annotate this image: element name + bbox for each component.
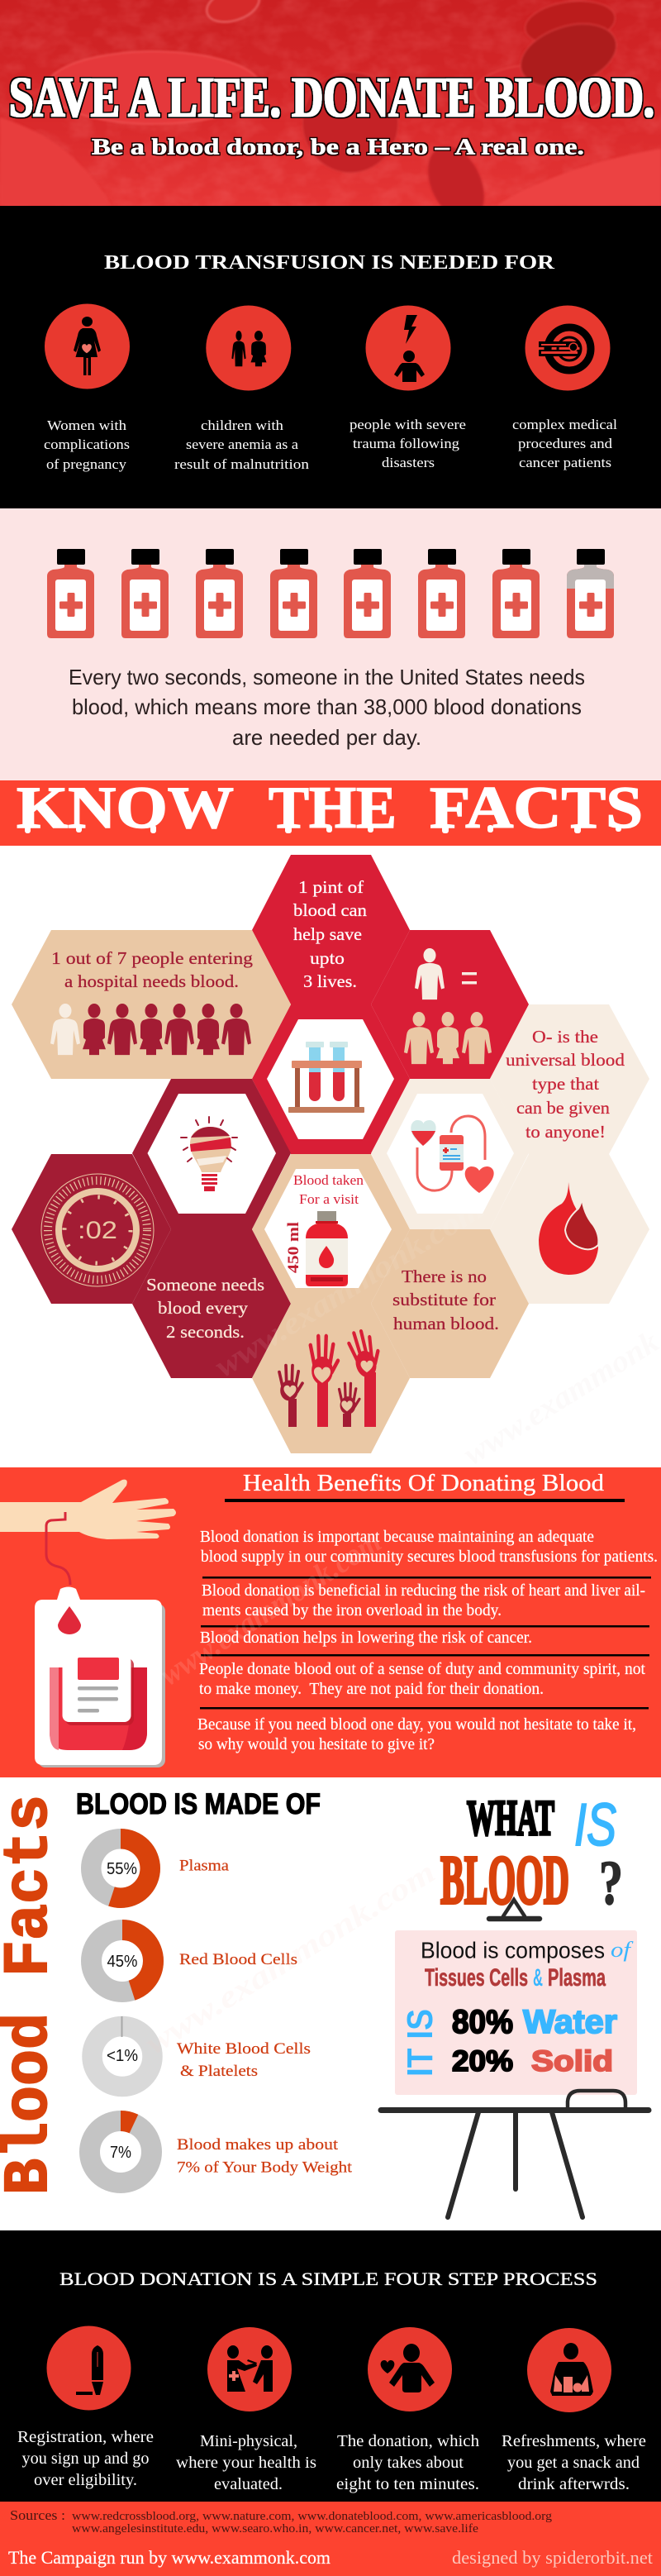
text: tissues cells plasma: Tissues Cells <box>425 1964 528 1992</box>
text: pint: help save <box>293 924 362 944</box>
text: complex <box>512 417 617 470</box>
band: know the facts: KNOW <box>17 775 234 841</box>
text: registration <box>17 2428 154 2489</box>
donut: white cells: <1% <box>107 2047 138 2065</box>
benefits text: so why would you hesitate to give it? <box>198 1735 435 1753</box>
text: blood taken <box>293 1172 364 1207</box>
text: refreshments <box>502 2432 646 2493</box>
icon: refreshments <box>527 2328 611 2412</box>
text: donation: eight to ten minutes. <box>336 2475 479 2493</box>
icon: trauma <box>365 306 451 390</box>
hex: pale IV <box>371 1079 529 1229</box>
text: complex: complex medical <box>512 417 617 432</box>
sources: www.redcrossblood.org, www.nature.com, www.donateblood.com, www.americasblood.org <box>72 2510 553 2523</box>
panel: blood facts <box>0 1777 661 2230</box>
text: donation: only takes about <box>353 2454 464 2472</box>
hex: one equals three <box>371 930 529 1079</box>
donut: plasma <box>91 1839 150 1898</box>
icon: test tubes <box>288 1042 364 1113</box>
campaign credit: The Campaign run by www.exammonk.com <box>8 2547 330 2568</box>
icon: registration pen <box>46 2326 131 2411</box>
icon: seven people <box>50 1004 251 1055</box>
text: tissues cells plasma: Plasma <box>548 1964 606 1992</box>
icon: tube <box>46 1512 70 1585</box>
panel: hexagon facts <box>0 846 661 1467</box>
text: children: severe anemia as a <box>186 436 299 452</box>
watermarks: www.exammonk.com <box>140 1854 441 2062</box>
icon: arm <box>0 1480 176 1539</box>
text: children <box>174 417 309 472</box>
text: refreshments: Refreshments, where <box>502 2432 646 2450</box>
icon: person equals three <box>404 948 492 1064</box>
stat: 80% water: Water <box>523 2004 617 2040</box>
easel top <box>489 1900 540 1919</box>
stat: 20% solid <box>452 2045 613 2077</box>
hex: blood volume <box>252 1154 410 1304</box>
text: one in seven: 1 out of 7 people entering <box>51 948 254 968</box>
text: someone needs <box>146 1275 264 1342</box>
benefits text: Blood donation is beneficial in reducing the risk of heart and liver ail- <box>202 1581 645 1600</box>
label: body weight: Blood makes up about <box>177 2136 339 2154</box>
heading: what is blood: IS <box>574 1792 616 1858</box>
label: body weight: 7% of Your Body Weight <box>177 2159 353 2176</box>
text: refreshments: drink afterwrds. <box>518 2475 630 2493</box>
benefits text <box>197 1528 658 1753</box>
text: O negative: can be given <box>516 1098 611 1118</box>
label: white cells: & Platelets <box>180 2063 258 2080</box>
band: know the facts: THE <box>269 775 397 841</box>
watermarks <box>140 1190 661 2062</box>
subtitle: Be a blood donor, be a Hero – A real one. <box>92 134 584 159</box>
watermarks: www.exammonk.com <box>154 1524 388 1693</box>
donut: red cells <box>91 1930 154 1992</box>
statistic text: Every two seconds, someone in the United States needs <box>69 665 585 689</box>
header banner <box>0 0 661 230</box>
icon: blood bag <box>35 1587 165 1767</box>
hex inner: white test tubes <box>267 1019 394 1139</box>
benefits text: Because if you need blood one day, you would not hesitate to take it, <box>197 1715 636 1734</box>
text: refreshments: you get a snack and <box>507 2454 640 2472</box>
statistic text: are needed per day. <box>232 725 421 750</box>
icon: bandaged bulb <box>181 1117 237 1191</box>
text: complex: cancer patients <box>519 455 611 470</box>
designer credit: designed by spiderorbit.net <box>452 2547 653 2568</box>
icon: clock: :02 <box>78 1217 117 1244</box>
text: pregnancy: of pregnancy <box>46 456 127 472</box>
text: children: children with <box>201 417 284 433</box>
text: no substitute: There is no <box>402 1267 487 1286</box>
text: trauma: disasters <box>382 455 435 470</box>
hex: someone needs <box>132 1229 291 1378</box>
panel: health benefits <box>0 1467 661 1777</box>
hex inner: white bulb <box>147 1094 276 1214</box>
donut: plasma: 55% <box>107 1860 137 1878</box>
text: O negative <box>506 1027 625 1142</box>
icon: pregnant woman <box>45 304 130 389</box>
sources <box>10 2507 553 2535</box>
text: donation: The donation, which <box>337 2432 479 2450</box>
heading: blood is made of: BLOOD IS MADE OF <box>76 1788 321 1820</box>
stat: 20% solid: 20% <box>452 2045 513 2077</box>
statistic text: blood, which means more than 38,000 blood donations <box>72 694 582 719</box>
panel: transfusion needs <box>0 206 661 508</box>
heading: what is blood: WHAT <box>467 1791 554 1845</box>
band: know the facts: FACTS <box>430 775 643 841</box>
stat: 20% solid: Solid <box>531 2045 613 2077</box>
text: blood taken: For a visit <box>299 1191 359 1207</box>
text: one in seven: a hospital needs blood. <box>64 971 239 991</box>
text: pint: upto <box>310 948 345 968</box>
icon: raised hands <box>279 1329 383 1427</box>
icon: IV blood bag <box>411 1116 494 1193</box>
icon: mini physical <box>207 2327 292 2411</box>
text: trauma: trauma following <box>353 436 459 451</box>
icon: clock <box>41 1174 154 1286</box>
text: it is: IT IS <box>400 2009 440 2077</box>
text: pregnancy: complications <box>44 436 130 452</box>
hex inner: white IV <box>387 1094 514 1214</box>
text: pint: blood can <box>293 900 367 920</box>
text: mini physical <box>176 2432 316 2493</box>
donut: white cells <box>93 2016 152 2087</box>
hex: no substitute <box>371 1229 529 1378</box>
text: trauma: people with severe <box>350 417 466 432</box>
heading: what is blood <box>440 1791 623 1919</box>
text: O negative: type that <box>532 1074 599 1094</box>
watermarks: www.exammonk <box>458 1324 661 1472</box>
hex: dark bulb <box>132 1079 291 1229</box>
text: blood is composes of: Blood is composes <box>421 1938 605 1963</box>
text: trauma <box>350 417 466 470</box>
text: someone needs: 2 seconds. <box>166 1322 245 1342</box>
stat: 80% water: 80% <box>452 2004 513 2040</box>
hex: hands <box>252 1304 410 1453</box>
text: complex: procedures and <box>518 436 613 451</box>
text: someone needs: Someone needs <box>146 1275 264 1295</box>
donut: body weight <box>89 2121 152 2182</box>
text: no substitute <box>392 1267 499 1333</box>
text: pregnancy <box>44 417 130 472</box>
benefits text: Blood donation helps in lowering the risk of cancer. <box>200 1629 532 1647</box>
icon: blood bottle <box>306 1211 348 1286</box>
text: someone needs: blood every <box>158 1298 248 1318</box>
heading: health benefits: Health Benefits Of Donating Blood <box>243 1470 605 1496</box>
hex: clock <box>12 1154 171 1304</box>
hex: top pint <box>252 855 410 1004</box>
text: pint <box>293 877 367 991</box>
donut: red cells: 45% <box>107 1953 138 1971</box>
text: mini physical: evaluated. <box>214 2475 283 2493</box>
benefits text: ments caused by the iron overload in the body. <box>202 1601 502 1620</box>
text: blood taken: Blood taken <box>293 1172 364 1188</box>
panel: donations per day <box>0 508 661 780</box>
hex: one in seven <box>12 930 291 1079</box>
benefits text: blood supply in our community secures blood transfusions for patients. <box>201 1548 658 1566</box>
text: pregnancy: Women with <box>47 417 127 433</box>
benefits text: Blood donation is important because maintaining an adequate <box>200 1528 594 1546</box>
easel board: of <box>611 1938 634 1962</box>
hex: O negative lower <box>490 1154 649 1304</box>
stat: 80% water <box>452 2004 617 2040</box>
easel stand <box>381 2091 649 2217</box>
icon: donation <box>368 2327 452 2411</box>
label: red cells: Red Blood Cells <box>179 1951 297 1968</box>
text: registration: Registration, where <box>17 2428 154 2446</box>
panel: four step process <box>0 2230 661 2502</box>
hex: O negative upper <box>490 1004 649 1154</box>
benefits text: to make money. They are not paid for their donation. <box>199 1680 544 1698</box>
easel board <box>395 1930 637 2095</box>
sources: Sources : <box>10 2507 65 2523</box>
heading: what is blood: ? <box>599 1849 623 1918</box>
watermarks: www.exammonk.com <box>209 1190 490 1385</box>
text: no substitute: human blood. <box>393 1314 499 1333</box>
bottles row <box>47 549 614 638</box>
text: donation <box>336 2432 479 2493</box>
band: know the facts <box>0 775 661 846</box>
text: O negative: universal blood <box>506 1050 625 1070</box>
text: registration: over eligibility. <box>34 2471 137 2489</box>
label: body weight <box>177 2136 353 2176</box>
text: children: result of malnutrition <box>174 456 309 472</box>
benefits text: People donate blood out of a sense of duty and community spirit, not <box>199 1660 645 1678</box>
text: pint: 3 lives. <box>303 971 357 991</box>
label: plasma: Plasma <box>179 1857 230 1875</box>
label: white cells <box>177 2040 311 2080</box>
sources: www.angelesinstitute.edu, www.searo.who.in, www.cancer.net, www.save.life <box>72 2522 478 2535</box>
text: mini physical: where your health is <box>176 2454 316 2472</box>
heading: four steps: BLOOD DONATION IS A SIMPLE FOUR STEP PROCESS <box>59 2268 597 2289</box>
text: one in seven <box>51 948 254 991</box>
text: O negative: O- is the <box>532 1027 598 1047</box>
text: 450 ml: 450 ml <box>285 1222 302 1273</box>
hex: centre test tubes <box>252 1004 410 1154</box>
icon: children <box>206 306 291 390</box>
text: tissues cells plasma: & <box>533 1964 543 1992</box>
icon: blood drops <box>539 1182 598 1275</box>
text: mini physical: Mini-physical, <box>200 2432 297 2450</box>
text: O negative: to anyone! <box>525 1122 606 1142</box>
text: registration: you sign up and go <box>21 2450 149 2468</box>
statistic text <box>69 665 585 750</box>
label: white cells: White Blood Cells <box>177 2040 311 2058</box>
icon: MRI scanner <box>525 306 610 390</box>
footer <box>0 2502 661 2576</box>
heading: transfusion: BLOOD TRANSFUSION IS NEEDED FOR <box>104 252 555 274</box>
donut: body weight: 7% <box>110 2144 131 2162</box>
text: pint: 1 pint of <box>298 877 364 897</box>
text: no substitute: substitute for <box>392 1290 496 1309</box>
